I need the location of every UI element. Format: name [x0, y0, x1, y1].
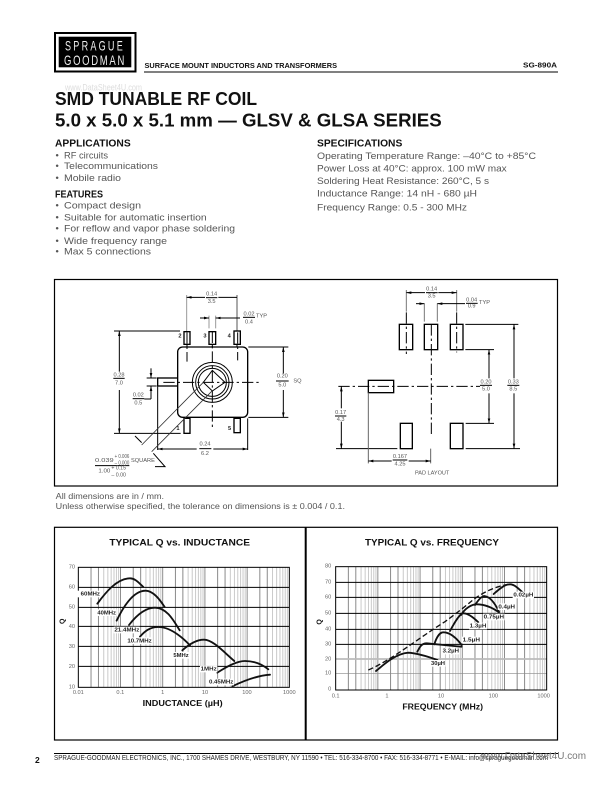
- drawing: pad layout: 0.9: [468, 303, 476, 309]
- drawing: component outline: 3: [203, 334, 206, 340]
- features: Wide frequency range: [64, 235, 167, 246]
- line chart: Q vs inductance: 20: [69, 664, 75, 670]
- line chart: Q vs inductance: 21.4MHz: [114, 628, 140, 634]
- drawing: pad layout: 3.5: [428, 293, 436, 299]
- features: Compact design: [64, 199, 141, 210]
- line chart: Q vs inductance: 10: [202, 690, 208, 696]
- features: FEATURES: [55, 188, 103, 200]
- drawing: component outline: + 0.006: [115, 454, 129, 460]
- x axis label: INDUCTANCE (µH): [143, 699, 223, 708]
- logo: Sprague Goodman: SPRAGUE: [65, 38, 125, 54]
- title: 5.0 x 5.0 x 5.1 mm — GLSV & GLSA SERIES: [55, 110, 442, 131]
- specifications: Operating Temperature Range: –40°C to +85°C: [317, 150, 536, 161]
- line chart: Q vs frequency: 80: [325, 564, 331, 570]
- line chart: Q vs frequency: 10: [438, 693, 444, 699]
- drawing: pad layout: TYP: [479, 300, 490, 306]
- drawing: pad layout: 0.04: [466, 298, 477, 304]
- line chart: Q vs frequency: 1.3µH: [470, 624, 486, 630]
- drawing: component outline: SQ: [293, 378, 302, 384]
- header bar: SURFACE MOUNT INDUCTORS AND TRANSFORMERS: [144, 61, 337, 70]
- applications: [55, 138, 158, 183]
- drawing: component outline: 0.28: [113, 373, 125, 379]
- line chart: Q vs frequency: 60: [325, 595, 331, 601]
- drawing: component outline: 1: [176, 426, 179, 432]
- line chart: Q vs frequency: 70: [325, 580, 331, 586]
- line chart: Q vs inductance: [69, 564, 296, 696]
- line chart: Q vs frequency: 30µH: [431, 661, 445, 667]
- features: For reflow and vapor phase soldering: [64, 223, 235, 234]
- drawing: pad layout: 5.0: [482, 387, 490, 393]
- line chart: Q vs frequency: 0.75µH: [484, 615, 504, 621]
- applications: Telecommunications: [64, 160, 158, 171]
- drawing: component outline: 7.0: [115, 380, 123, 386]
- dimension notes: All dimensions are in / mm.: [56, 492, 164, 501]
- line chart: Q vs inductance: 1000: [283, 690, 296, 696]
- applications: APPLICATIONS: [55, 138, 131, 150]
- specifications: Frequency Range: 0.5 - 300 MHz: [317, 202, 467, 213]
- features: •: [56, 212, 59, 223]
- drawing: component outline: 0.14: [206, 292, 217, 298]
- line chart: Q vs frequency: 10: [325, 671, 331, 677]
- drawing: pad layout: 0.33: [508, 379, 519, 385]
- line chart: Q vs frequency: 20: [325, 656, 331, 662]
- drawing: component outline: SQUARE: [131, 458, 155, 464]
- drawing: component outline: 6.2: [201, 451, 209, 457]
- drawing: component outline: TYP: [256, 314, 267, 320]
- applications: RF circuits: [64, 149, 108, 160]
- drawing: component outline: + 0.15: [111, 465, 126, 471]
- line chart: Q vs inductance: 1MHz: [201, 667, 217, 673]
- applications: Mobile radio: [64, 172, 121, 183]
- applications: •: [56, 160, 59, 171]
- drawing: component outline: [95, 292, 302, 478]
- line chart: Q vs inductance: 0.1: [116, 690, 124, 696]
- specifications: SPECIFICATIONS: [317, 138, 402, 150]
- line chart: Q vs frequency: 1.5µH: [463, 638, 480, 644]
- line chart: Q vs frequency: 30: [325, 642, 331, 648]
- drawing: pad layout: [335, 286, 520, 476]
- line chart: Q vs inductance: 10.7MHz: [127, 638, 152, 644]
- header bar: [144, 61, 558, 72]
- line chart: Q vs inductance: 50: [69, 605, 75, 611]
- specifications: Soldering Heat Resistance: 260°C, 5 s: [317, 175, 489, 186]
- line chart: Q vs inductance: 0.45MHz: [209, 680, 234, 686]
- drawing: component outline: – 0.00: [111, 472, 126, 478]
- dimension notes: Unless otherwise specified, the tolerance on dimensions is ± 0.004 / 0.1.: [56, 502, 345, 511]
- chart title: TYPICAL Q vs. FREQUENCY: [365, 538, 499, 548]
- drawing: component outline: 0.02: [243, 312, 255, 318]
- drawing: pad layout: 0.20: [480, 379, 492, 385]
- line chart: Q vs frequency: 3.2µH: [443, 649, 459, 655]
- dimension notes: [56, 492, 345, 511]
- drawing: component outline: – 0.000: [115, 460, 129, 466]
- panel: Q vs frequency: [317, 538, 550, 711]
- footer: SPRAGUE-GOODMAN ELECTRONICS, INC., 1700 SHAMES DRIVE, WESTBURY, NY 11590 • TEL: 516-334-8700 • FAX: 516-334-8771 • E-MAIL: info@spraguegoodman.com: [54, 755, 548, 762]
- applications: •: [56, 172, 59, 183]
- features: Max 5 connections: [64, 245, 151, 256]
- drawing: component outline: 5: [228, 426, 231, 432]
- drawing: component outline: 0.24: [199, 442, 211, 448]
- line chart: Q vs inductance: 5MHz: [173, 653, 189, 659]
- drawing: pad layout: 8.5: [509, 387, 517, 393]
- line chart: Q vs frequency: 1000: [537, 693, 550, 699]
- footer: www.DataSheet4U.com: [480, 751, 586, 762]
- line chart: Q vs inductance: 1: [161, 690, 164, 696]
- line chart: Q vs frequency: 50: [325, 611, 331, 617]
- title: [55, 88, 442, 131]
- header bar: SG-890A: [523, 61, 558, 70]
- line chart: Q vs inductance: 100: [242, 690, 252, 696]
- panel: Q vs inductance: [59, 538, 296, 708]
- y axis label: Q: [59, 618, 66, 624]
- drawing: component outline: 5.0: [278, 383, 286, 389]
- line chart: Q vs frequency: [325, 564, 550, 699]
- line chart: Q vs inductance: 70: [69, 564, 75, 570]
- drawing: component outline: 3.5: [208, 299, 216, 305]
- line chart: Q vs frequency: 1: [385, 693, 389, 699]
- drawing: component outline: 2: [178, 334, 181, 340]
- line chart: Q vs inductance: 40MHz: [97, 610, 116, 616]
- drawing: pad layout: PAD LAYOUT: [415, 470, 450, 476]
- drawing: component outline: 4: [228, 334, 232, 340]
- specifications: [317, 138, 536, 213]
- drawing: component outline: 0.02: [133, 392, 144, 398]
- footer: [35, 751, 586, 765]
- line chart: Q vs inductance: 60MHz: [81, 592, 100, 598]
- specifications: Power Loss at 40°C: approx. 100 mW max: [317, 163, 507, 174]
- chart title: TYPICAL Q vs. INDUCTANCE: [109, 538, 250, 548]
- features: •: [56, 199, 59, 210]
- logo: Sprague Goodman: [55, 33, 136, 72]
- drawing: component outline: 0.5: [134, 400, 142, 406]
- logo: Sprague Goodman: GOODMAN: [64, 52, 126, 68]
- line chart: Q vs frequency: 0.1: [332, 693, 340, 699]
- footer: 2: [35, 755, 40, 765]
- drawing: pad layout: 4.25: [394, 461, 406, 467]
- line chart: Q vs inductance: 10: [69, 685, 75, 691]
- specifications: Inductance Range: 14 nH - 680 µH: [317, 188, 477, 199]
- drawing: pad layout: 0.167: [393, 454, 407, 460]
- panel: dimension drawings: [54, 280, 558, 486]
- drawing: pad layout: 0.14: [426, 286, 437, 292]
- line chart: Q vs frequency: 0.4µH: [498, 604, 515, 610]
- line chart: Q vs inductance: 30: [69, 644, 75, 650]
- drawing: component outline: 0.20: [277, 374, 288, 380]
- drawing: component outline: 0.4: [245, 320, 253, 326]
- line chart: Q vs inductance: 60: [69, 585, 75, 591]
- line chart: Q vs inductance: 0.01: [73, 690, 84, 696]
- watermark: www.DataSheet4U.com: [64, 83, 142, 93]
- line chart: Q vs frequency: 100: [489, 693, 498, 699]
- drawing: component outline: 0.039: [95, 458, 114, 464]
- x axis label: FREQUENCY (MHz): [402, 702, 483, 711]
- applications: •: [56, 149, 59, 160]
- y axis label: Q: [317, 619, 324, 625]
- features: [55, 188, 235, 256]
- features: Suitable for automatic insertion: [64, 212, 207, 223]
- features: •: [56, 235, 59, 246]
- features: •: [56, 245, 59, 256]
- drawing: component outline: 1.00: [98, 468, 110, 474]
- drawing: pad layout: 4.3: [337, 417, 345, 423]
- panel: charts frame with centre divider: [54, 527, 558, 740]
- features: •: [56, 223, 59, 234]
- line chart: Q vs inductance: 40: [69, 624, 75, 630]
- line chart: Q vs frequency: 0.02µH: [513, 593, 533, 599]
- line chart: Q vs frequency: 40: [325, 627, 331, 633]
- drawing: pad layout: 0.17: [335, 410, 346, 416]
- title: SMD TUNABLE RF COIL: [55, 88, 257, 109]
- line chart: Q vs frequency: 0: [328, 687, 331, 693]
